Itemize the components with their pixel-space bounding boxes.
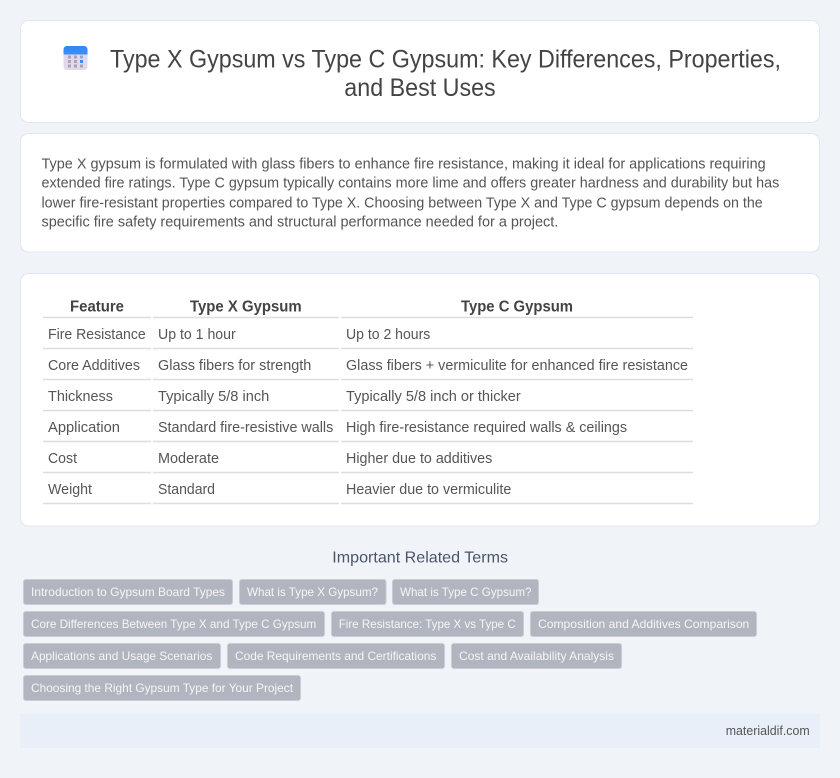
row: cost: Cost [48, 451, 77, 467]
tag [530, 612, 756, 636]
panel: summary paragraph: extended fire ratings. Type C gypsum typically contains more lime and offers greater hardness and durability but has [42, 176, 779, 192]
row: cost: Higher due to additives [346, 451, 492, 467]
panel: summary paragraph: lower fire-resistant properties compared to Type X. Choosing between Type X and Type C gypsum depends on the [42, 195, 763, 211]
row: fire resistance: Up to 1 hour [158, 327, 236, 343]
footer bar: materialdif.com [726, 724, 810, 738]
table header row [70, 299, 573, 316]
panel: summary paragraph: Type X gypsum is formulated with glass fibers to enhance fire resistance, making it ideal for applications requiring [42, 156, 766, 172]
row: fire resistance: Fire Resistance [48, 327, 146, 343]
tag [24, 644, 220, 668]
row: cost: Moderate [158, 451, 219, 467]
row: weight [48, 482, 511, 498]
row: thickness: Thickness [48, 389, 113, 405]
tag [24, 580, 232, 604]
panel: summary paragraph: specific fire safety requirements and structural performance needed for a project. [42, 214, 558, 230]
panel: comparison table [20, 274, 820, 526]
row: fire resistance [48, 327, 430, 343]
tag [332, 612, 524, 636]
title: Type X Gypsum vs Type C Gypsum: Key Differences, Properties, [110, 46, 781, 74]
row: thickness: Typically 5/8 inch or thicker [346, 389, 521, 405]
title [110, 46, 781, 102]
icon: calendar [64, 46, 88, 70]
row: cost [48, 451, 492, 467]
tag [452, 644, 622, 668]
heading: important related terms: Important Related Terms [332, 550, 508, 567]
row: thickness: Typically 5/8 inch [158, 389, 269, 405]
tag: Introduction to Gypsum Board Types [31, 585, 225, 599]
row: fire resistance: Up to 2 hours [346, 327, 430, 343]
tag: Composition and Additives Comparison [538, 617, 749, 631]
tag [240, 580, 386, 604]
tag: Core Differences Between Type X and Type C Gypsum [31, 617, 316, 631]
tag: Applications and Usage Scenarios [31, 649, 212, 663]
tag [24, 612, 324, 636]
row: weight: Weight [48, 482, 92, 498]
panel: summary paragraph [20, 134, 820, 252]
tag: Code Requirements and Certifications [235, 649, 436, 663]
tag: Fire Resistance: Type X vs Type C [339, 617, 516, 631]
footer bar [20, 714, 820, 748]
table header row: Type X Gypsum [190, 299, 302, 316]
row: weight: Standard [158, 482, 215, 498]
tag: Cost and Availability Analysis [459, 649, 614, 663]
row: application: Standard fire-resistive walls [158, 420, 333, 436]
tag: Choosing the Right Gypsum Type for Your Project [31, 681, 294, 695]
tag [24, 676, 300, 700]
panel: related term tags [24, 580, 756, 700]
panel: title header [20, 20, 820, 122]
row: core additives: Core Additives [48, 358, 140, 374]
tag [228, 644, 444, 668]
row: core additives: Glass fibers for strength [158, 358, 311, 374]
table header row: Type C Gypsum [461, 299, 573, 316]
title: and Best Uses [344, 74, 496, 102]
tag: What is Type C Gypsum? [400, 585, 532, 599]
row: thickness [48, 389, 521, 405]
table header row: Feature [70, 299, 124, 316]
row: weight: Heavier due to vermiculite [346, 482, 511, 498]
row: core additives: Glass fibers + vermiculite for enhanced fire resistance [346, 358, 688, 374]
row: core additives [48, 358, 688, 374]
tag: What is Type X Gypsum? [247, 585, 378, 599]
tag [392, 580, 538, 604]
row: application: High fire-resistance required walls & ceilings [346, 420, 627, 436]
row: application: Application [48, 420, 120, 436]
row: application [48, 420, 627, 436]
